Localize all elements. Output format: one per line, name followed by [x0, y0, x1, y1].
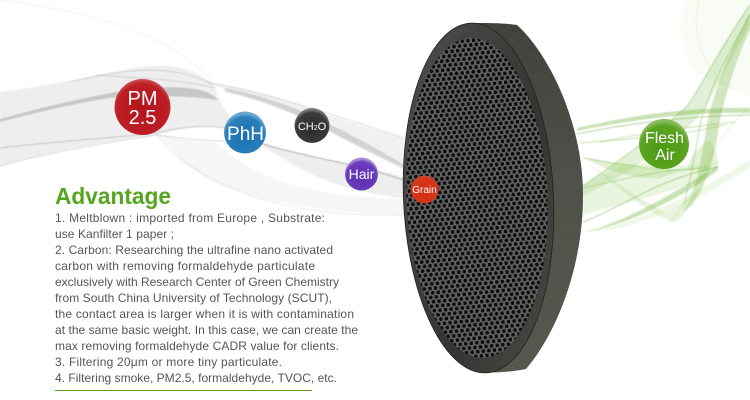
gray smoke waves — [0, 0, 405, 215]
filter front ring — [396, 20, 561, 376]
bubble: PM 2.5: 2.5 — [129, 107, 156, 129]
filter rim — [467, 23, 583, 372]
bubble: PM 2.5 — [114, 79, 170, 135]
text block: advantages list: 3. Filtering 20μm or more tiny particulate. — [55, 355, 282, 369]
text block: advantages list: carbon with removing formaldehyde particulate — [55, 259, 315, 273]
text block: advantages list: max removing formaldehyde CADR value for clients. — [55, 339, 339, 353]
text block: advantages list: at the same basic weight. In this case, we can create the — [55, 323, 358, 337]
bubble: Flesh Air: Flesh — [645, 130, 684, 147]
text block: advantages list: use Kanfilter 1 paper ; — [55, 227, 174, 241]
text block: advantages list: 2. Carbon: Researching the ultrafine nano activated — [55, 243, 333, 257]
bubble: Hair: Hair — [349, 166, 375, 182]
text block: advantages list: the contact area is larger when it is with contamination — [55, 307, 354, 321]
bubble: CH2O: CH2O — [298, 121, 327, 133]
text block: advantages list: exclusively with Research Center of Green Chemistry — [55, 275, 339, 289]
bubble: Grain — [410, 176, 438, 204]
bubble: PhH: PhH — [227, 124, 264, 145]
bubble: Hair — [345, 158, 378, 190]
bubble: Flesh Air: Air — [655, 147, 675, 164]
bubble: PM 2.5: PM — [128, 88, 158, 110]
underline rule — [55, 390, 312, 391]
text block: advantages list — [55, 211, 358, 385]
text block: advantages list: 1. Meltblown : imported from Europe , Substrate: — [55, 211, 325, 225]
text block: advantages list: from South China University of Technology (SCUT), — [55, 291, 332, 305]
bubble: Flesh Air — [639, 119, 689, 169]
bubble: Grain: Grain — [412, 185, 437, 196]
filter honeycomb mesh — [400, 35, 554, 361]
bubble: CH2O — [294, 108, 330, 143]
panel: filter disc — [396, 20, 583, 376]
text block: advantages list: 4. Filtering smoke, PM2.5, formaldehyde, TVOC, etc. — [55, 371, 337, 385]
green fresh air waves — [577, 0, 750, 232]
heading: Advantage: Advantage — [55, 183, 171, 209]
bubble: PhH — [224, 112, 266, 154]
